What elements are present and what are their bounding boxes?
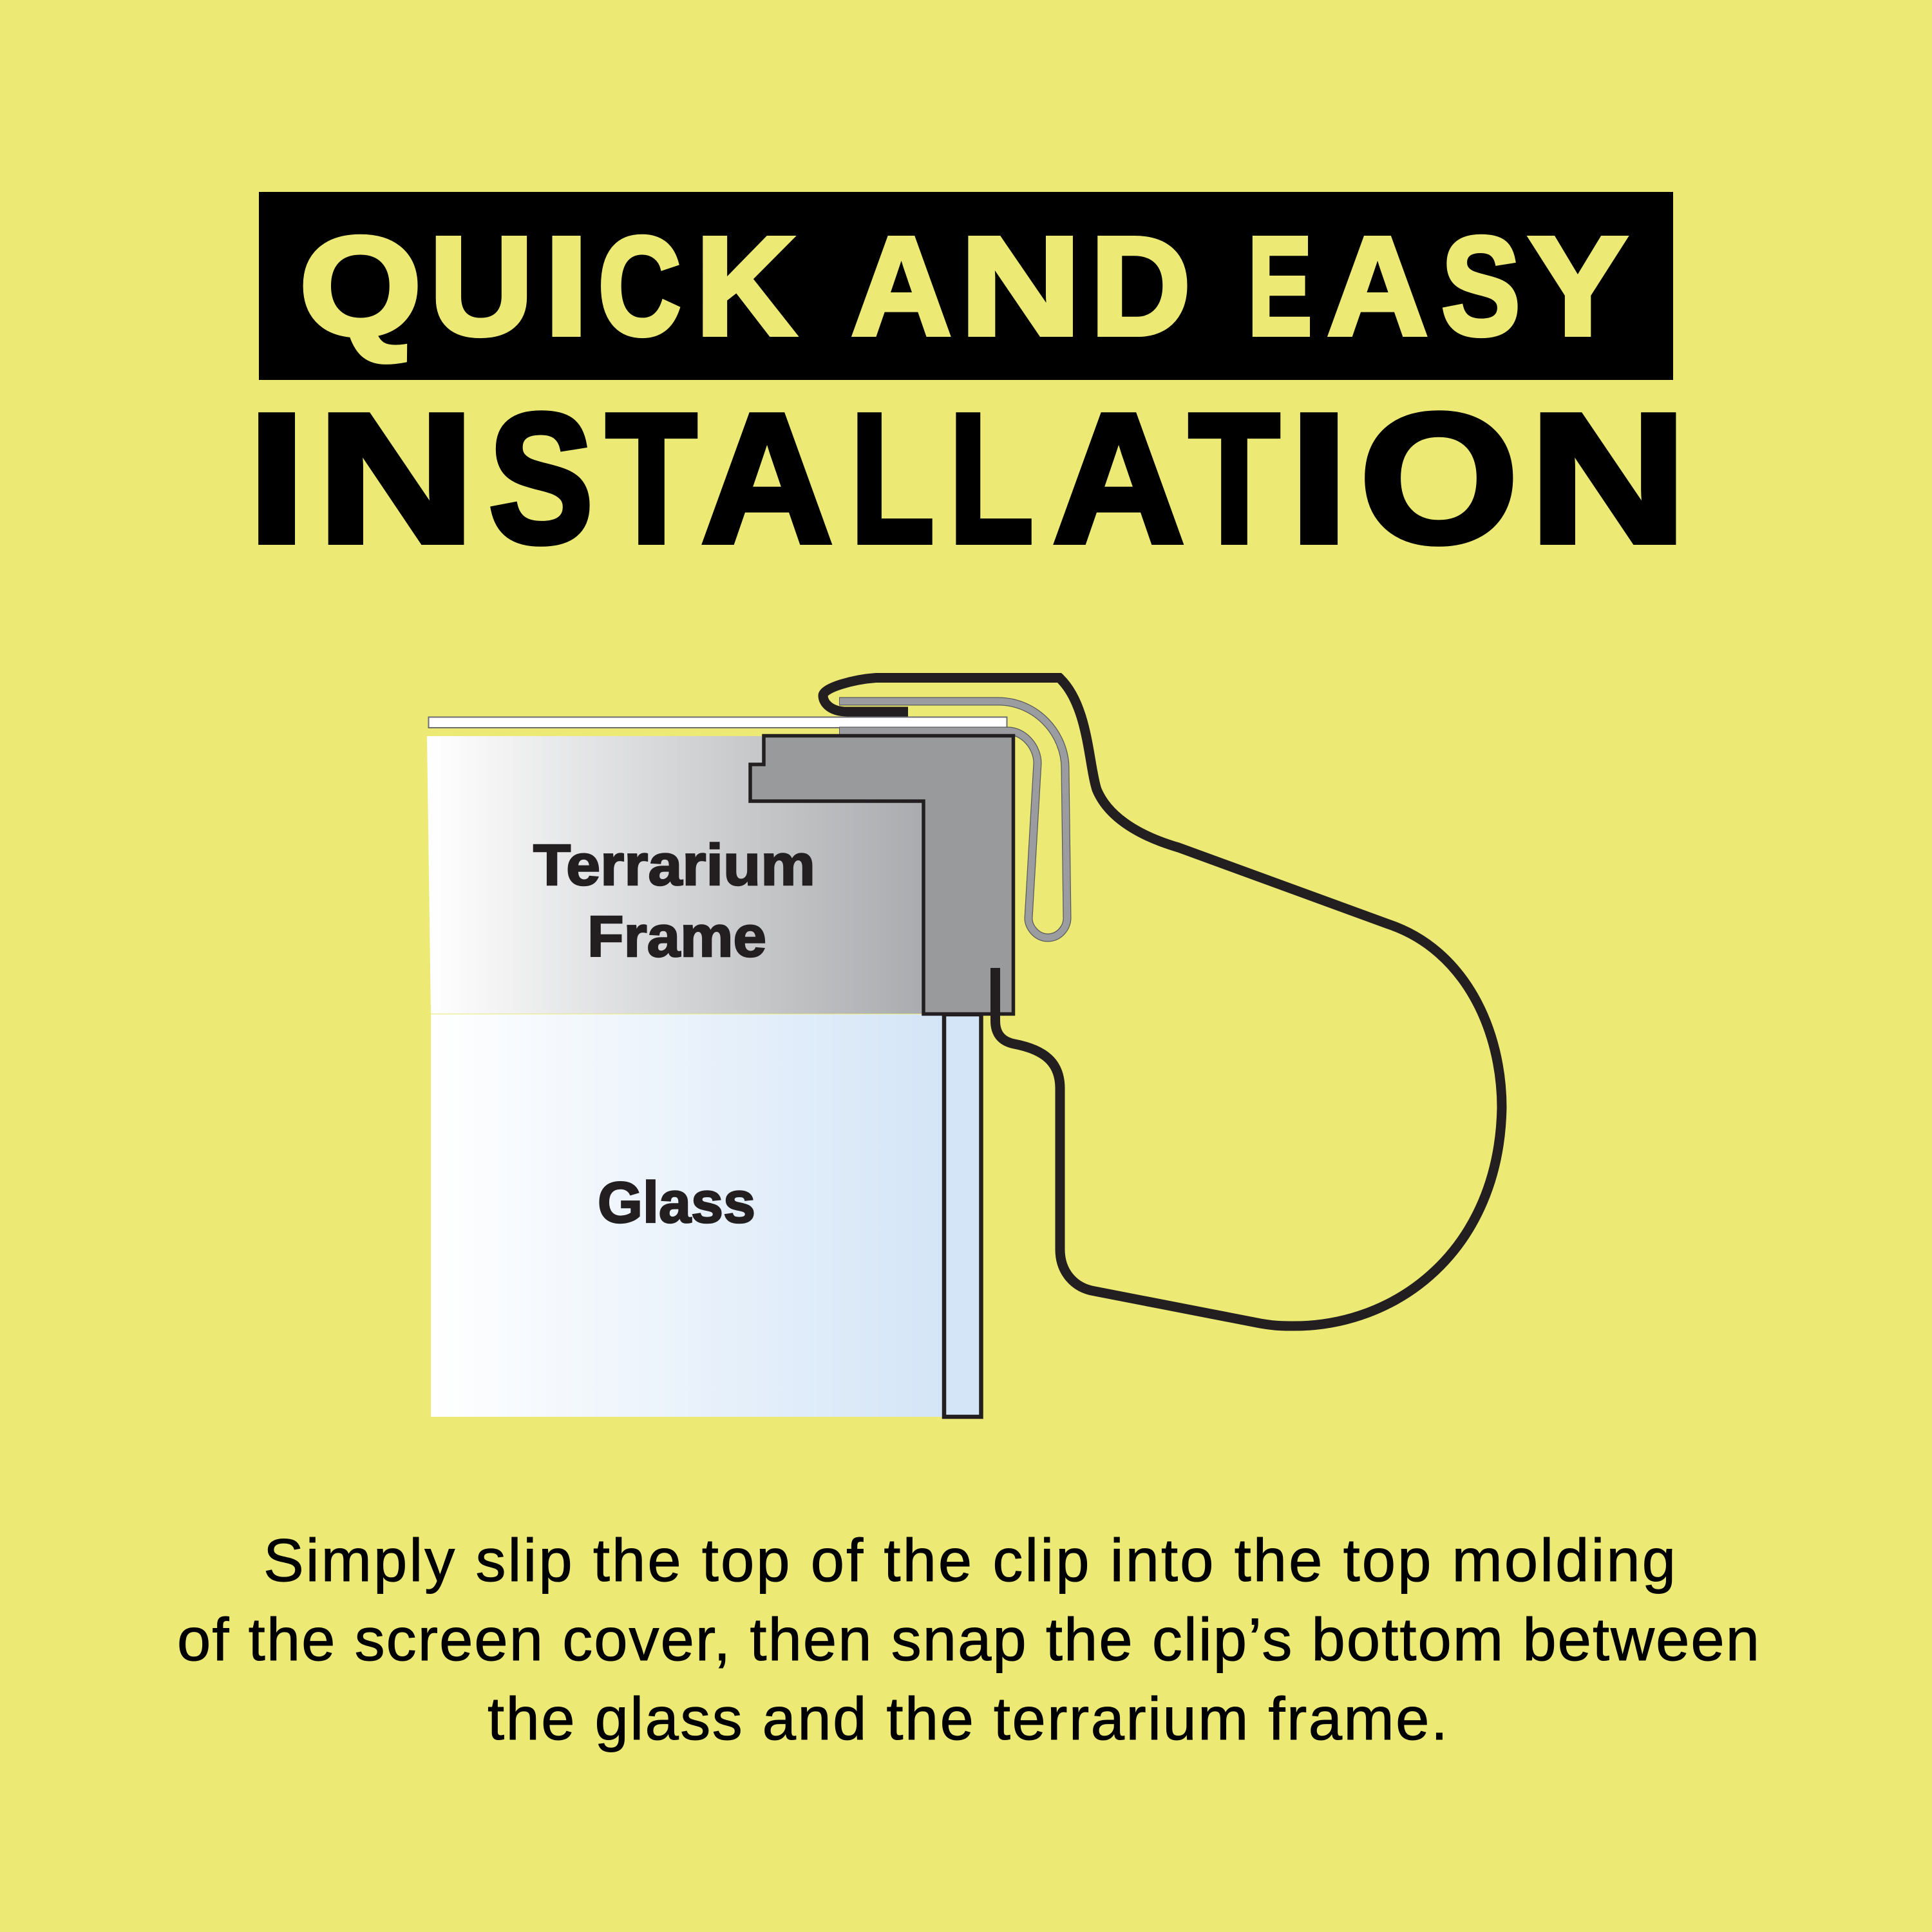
title: installation: T: [606, 375, 697, 581]
terrarium frame background panel: [427, 736, 925, 1014]
instruction text: [177, 1526, 1759, 1752]
title banner: quick and easy: S: [1441, 209, 1520, 365]
title: installation: N: [317, 375, 475, 581]
title: installation: I: [1289, 375, 1349, 581]
black clip outline: [823, 677, 1502, 1326]
title: installation: L: [949, 375, 1034, 581]
glass background panel: [431, 1014, 944, 1417]
title: installation: T: [1189, 375, 1280, 581]
title banner: quick and easy: K: [696, 209, 796, 365]
screen cover panel: [429, 717, 1007, 728]
title banner: quick and easy: Y: [1528, 209, 1627, 365]
title: installation: L: [850, 375, 934, 581]
grey metal clip: [839, 701, 1067, 938]
title banner: quick and easy: D: [1090, 209, 1191, 365]
instruction text: Simply slip the top of the clip into the top molding: [263, 1526, 1676, 1594]
title banner: quick and easy: [259, 192, 1673, 380]
label: terrarium frame: Frame: [587, 905, 766, 969]
title banner: quick and easy: A: [1327, 209, 1428, 365]
label: terrarium frame: Terrarium: [533, 833, 815, 898]
title banner: quick and easy: U: [430, 209, 533, 365]
title banner: quick and easy: N: [960, 209, 1081, 365]
title: installation: I: [248, 375, 306, 581]
terrarium frame cross-section: [750, 735, 1014, 1014]
title: installation: A: [701, 375, 833, 581]
title: installation: N: [1529, 375, 1687, 581]
title banner: quick and easy: A: [851, 209, 952, 365]
title: installation: O: [1359, 375, 1519, 581]
title banner: quick and easy: I: [544, 209, 589, 365]
title banner: quick and easy: Q: [299, 209, 422, 365]
diagram: clip on terrarium frame: [427, 677, 1502, 1417]
instruction text: of the screen cover, then snap the clip’s bottom between: [177, 1605, 1759, 1673]
title: installation: A: [1052, 375, 1185, 581]
glass edge: [944, 1014, 981, 1417]
title banner: quick and easy: E: [1247, 209, 1312, 365]
instruction text: the glass and the terrarium frame.: [488, 1685, 1448, 1752]
label: terrarium frame: [533, 833, 815, 969]
label: glass: Glass: [598, 1171, 755, 1235]
title: installation: S: [489, 375, 593, 581]
title banner: quick and easy: C: [598, 209, 681, 365]
